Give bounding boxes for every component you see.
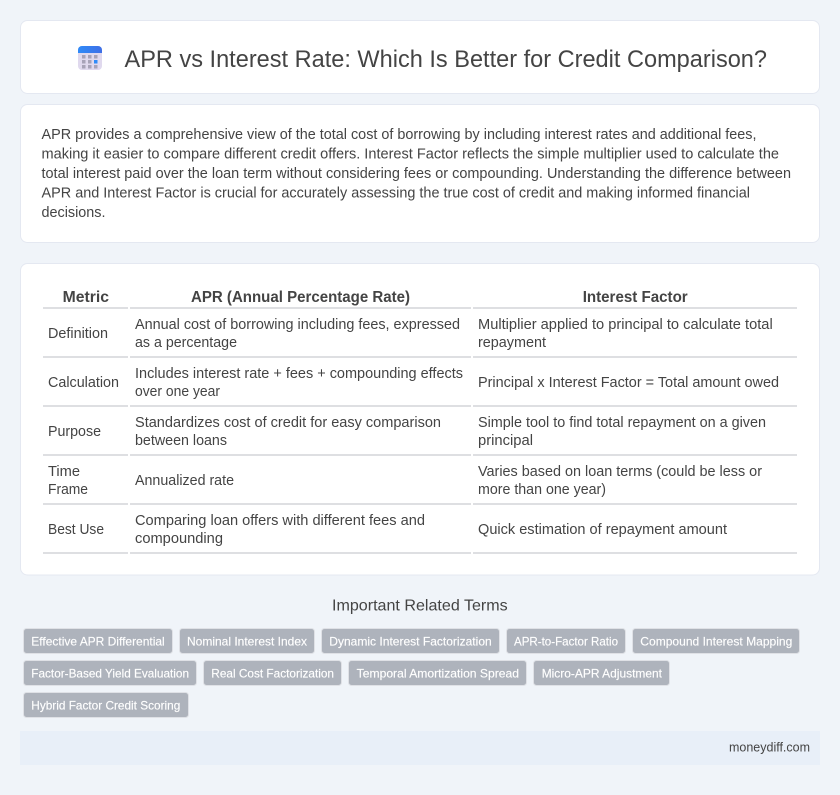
table header row: Metric [63, 289, 109, 306]
row: purpose: between loans [135, 433, 227, 449]
panel: related term chips: Temporal Amortization Spread [357, 666, 519, 680]
table header row: Interest Factor [583, 289, 688, 306]
panel: header [20, 20, 820, 94]
row: best use: Comparing loan offers with different fees and [135, 513, 425, 529]
row: purpose: Standardizes cost of credit for easy comparison [135, 415, 441, 431]
icon: calendar [78, 46, 102, 70]
row: definition [48, 317, 773, 351]
panel: related term chips: Nominal Interest Index [187, 634, 307, 648]
row: purpose: Simple tool to find total repayment on a given [478, 415, 766, 431]
panel: related term chips [24, 628, 800, 718]
row: purpose: principal [478, 433, 533, 449]
footer: moneydiff.com [729, 740, 810, 754]
row: best use: Quick estimation of repayment amount [478, 522, 727, 538]
row: calculation [48, 366, 779, 400]
panel: intro text: APR and Interest Factor is crucial for accurately assessing the true cost of credit and making informed financial [42, 186, 750, 202]
row: calculation: Principal x Interest Factor = Total amount owed [478, 375, 779, 391]
row: time frame: Varies based on loan terms (could be less or [478, 464, 762, 480]
row: best use: Best Use [48, 522, 104, 538]
row: definition: Definition [48, 326, 108, 342]
panel: intro text: APR provides a comprehensive view of the total cost of borrowing by including interest rates and additional fees, [42, 127, 756, 143]
row: purpose: Purpose [48, 424, 101, 440]
panel: related term chips: Effective APR Differential [31, 634, 165, 648]
panel: related term chips: APR-to-Factor Ratio [514, 634, 618, 648]
row: definition: as a percentage [135, 335, 237, 351]
row: purpose [48, 415, 766, 449]
row: definition: Multiplier applied to principal to calculate total [478, 317, 773, 333]
panel: intro text: decisions. [42, 205, 106, 221]
heading: important related terms: Important Related Terms [332, 598, 508, 614]
panel: related term chips: Factor-Based Yield Evaluation [31, 666, 189, 680]
panel: related term chips: Real Cost Factorization [211, 666, 334, 680]
row: definition: Annual cost of borrowing including fees, expressed [135, 317, 460, 333]
row: time frame: more than one year) [478, 482, 606, 498]
row: calculation: Includes interest rate + fees + compounding effects [135, 366, 463, 382]
title: APR vs Interest Rate: Which Is Better for Credit Comparison? [124, 46, 767, 73]
row: calculation: Calculation [48, 375, 119, 391]
table header row [63, 289, 688, 306]
panel: related term chips: Compound Interest Mapping [640, 634, 792, 648]
panel: related term chips: Micro-APR Adjustment [542, 666, 663, 680]
row: calculation: over one year [135, 384, 220, 400]
panel: comparison table [20, 264, 820, 575]
row: time frame: Annualized rate [135, 473, 234, 489]
panel: intro text: total interest paid over the loan term without considering fees or compounding. Understanding the difference between [42, 166, 791, 182]
table header row: APR (Annual Percentage Rate) [191, 289, 410, 306]
row: best use [48, 513, 727, 547]
footer [20, 731, 820, 765]
panel: related term chips: Hybrid Factor Credit Scoring [31, 698, 180, 712]
panel: intro text [20, 104, 820, 242]
panel: intro text: making it easier to compare different credit offers. Interest Factor reflects the simple multiplier used to calculate the [42, 146, 779, 162]
row: best use: compounding [135, 531, 223, 547]
row: definition: repayment [478, 335, 546, 351]
row: time frame [48, 464, 762, 498]
panel: related term chips: Dynamic Interest Factorization [329, 634, 492, 648]
row: time frame: Time [48, 464, 80, 480]
row: time frame: Frame [48, 482, 88, 498]
